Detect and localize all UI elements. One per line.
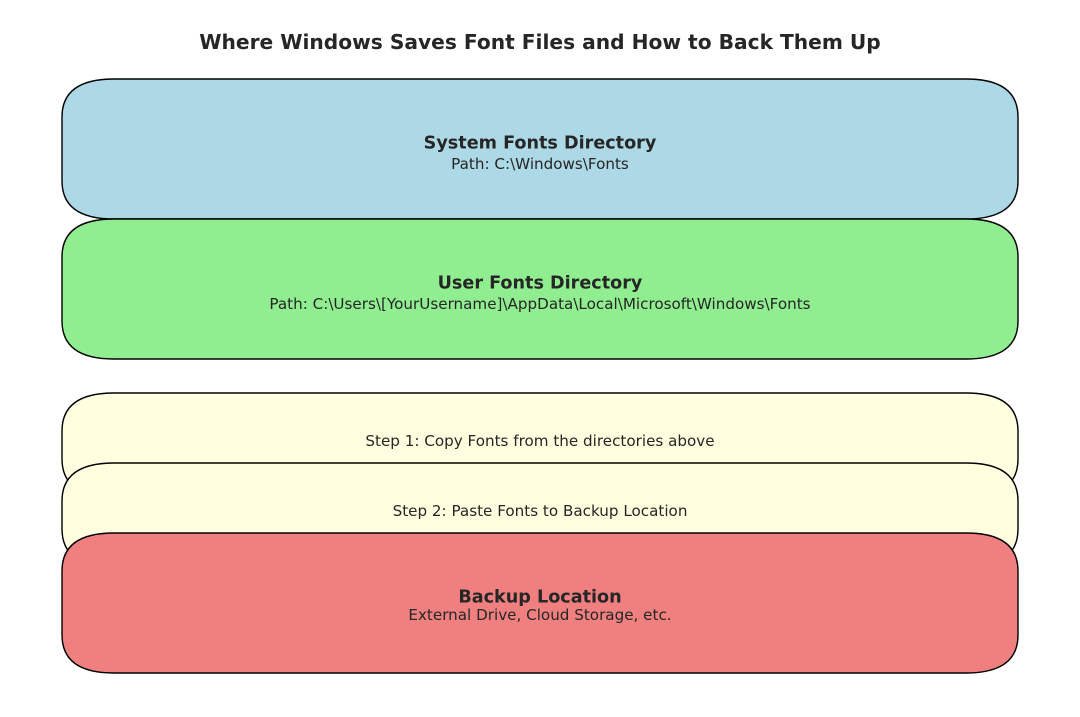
panel: backup location [62,533,1018,673]
text: backup options: External Drive, Cloud Storage, etc. [408,606,672,624]
text: user fonts path: Path: C:\Users\[YourUsername]\AppData\Local\Microsoft\Windows\Fonts [269,295,811,313]
text: step 2: Step 2: Paste Fonts to Backup Location [393,502,687,520]
panel: user fonts directory [62,219,1018,359]
text: system fonts path: Path: C:\Windows\Fonts [451,155,629,173]
box: step 2 [62,463,1018,567]
box: system fonts [62,79,1018,219]
text: step 1: Step 1: Copy Fonts from the directories above [365,432,715,450]
heading: backup location: Backup Location [458,588,622,608]
box: backup location [62,533,1018,673]
heading: system fonts directory: System Fonts Directory [424,134,657,154]
heading: user fonts directory: User Fonts Directory [438,274,643,294]
box: step 1 [62,393,1018,497]
panel: system fonts directory [62,79,1018,219]
panel: step 2 [62,463,1018,567]
panel: step 1 [62,393,1018,497]
title: Where Windows Saves Font Files and How to Back Them Up [199,30,881,54]
box: user fonts [62,219,1018,359]
